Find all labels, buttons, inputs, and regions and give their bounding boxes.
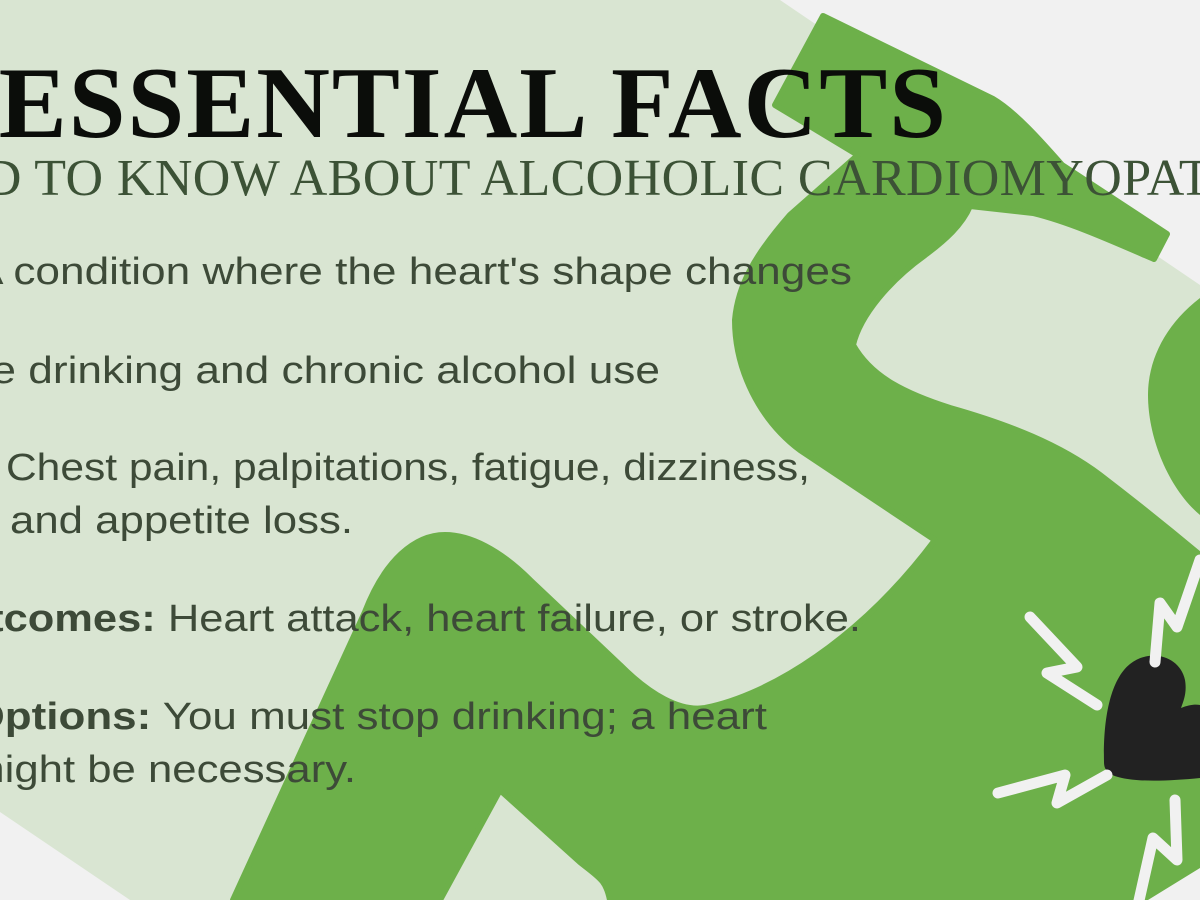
illustration: person drinking from bottle bbox=[233, 16, 1200, 900]
icon: shock bolts bbox=[998, 560, 1200, 900]
bottom-right corner background bbox=[1148, 868, 1200, 900]
bolt bottom bbox=[1138, 800, 1177, 900]
icon: heart bbox=[1104, 656, 1200, 781]
bolt lower left bbox=[998, 775, 1107, 803]
fact: treatment bbox=[0, 695, 768, 790]
fact: symptoms bbox=[0, 445, 810, 541]
bolt top bbox=[1155, 560, 1200, 662]
head bbox=[1148, 298, 1200, 515]
bolt upper left bbox=[1030, 617, 1097, 705]
